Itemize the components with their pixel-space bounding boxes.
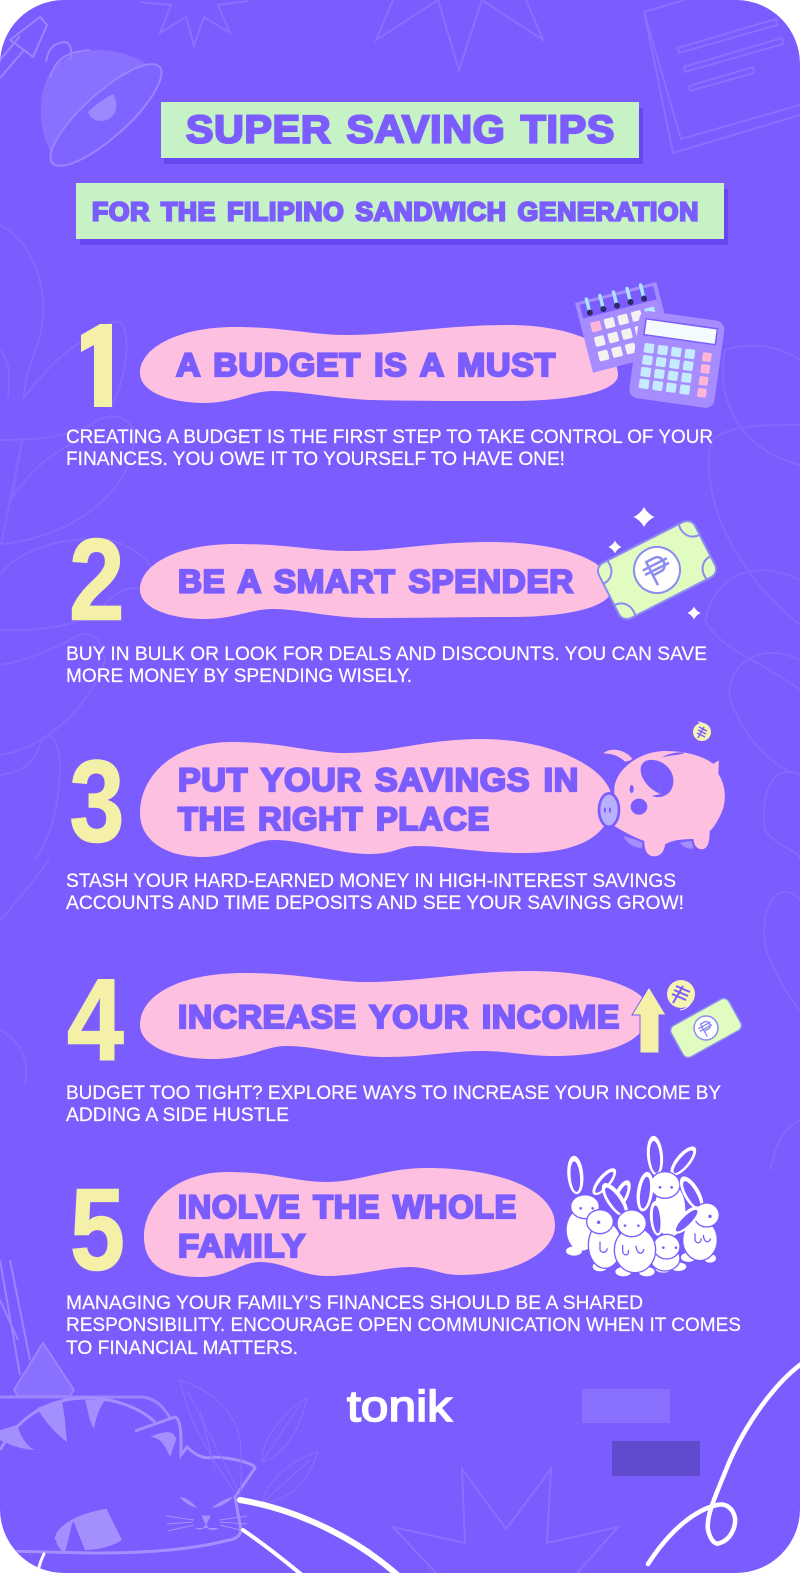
decoration: white swooshes left	[38, 1500, 403, 1573]
tip 4	[66, 956, 744, 1126]
body 4: ADDING A SIDE HUSTLE	[66, 1104, 289, 1126]
heading 5: FAMILY	[178, 1228, 306, 1264]
number 4: 4	[67, 956, 124, 1085]
doodle: lamp	[0, 16, 162, 167]
body 2: MORE MONEY BY SPENDING WISELY.	[66, 665, 412, 687]
decoration: dark rectangle	[612, 1441, 700, 1476]
icon: sparkle large	[634, 507, 654, 527]
icon: small banknote	[668, 996, 744, 1060]
heading 3: THE RIGHT PLACE	[178, 801, 490, 837]
subtitle banner	[76, 183, 728, 245]
body 5: MANAGING YOUR FAMILY’S FINANCES SHOULD BE A SHARED	[66, 1292, 643, 1314]
tip 3	[66, 722, 726, 914]
icon: calculator	[628, 310, 726, 409]
body 4: BUDGET TOO TIGHT? EXPLORE WAYS TO INCREASE YOUR INCOME BY	[66, 1082, 721, 1104]
doodle: sleeping cat	[0, 1260, 255, 1553]
heading 1: A BUDGET IS A MUST	[176, 347, 556, 383]
decoration: light rectangle	[582, 1389, 670, 1423]
rabbit left	[566, 1155, 620, 1256]
tip 1	[66, 281, 726, 470]
heading pill 4	[140, 971, 650, 1059]
icon: sparkle small	[608, 540, 622, 554]
body 1: FINANCES. YOU OWE IT TO YOURSELF TO HAVE ONE!	[66, 448, 565, 470]
rabbit front	[597, 1171, 656, 1276]
rabbit back	[645, 1135, 701, 1237]
decoration: white squiggle right	[648, 1362, 800, 1564]
doodle: leaves near cat	[180, 1380, 318, 1503]
icon: piggy bank	[599, 750, 726, 857]
icon: peso banknote	[595, 518, 719, 622]
body 1: CREATING A BUDGET IS THE FIRST STEP TO TAKE CONTROL OF YOUR	[66, 426, 713, 448]
title banner	[161, 102, 643, 164]
body 3: ACCOUNTS AND TIME DEPOSITS AND SEE YOUR SAVINGS GROW!	[66, 892, 684, 914]
doodle: left leaves	[0, 225, 152, 1085]
heading 2: BE A SMART SPENDER	[178, 564, 574, 600]
doodle: star bottom	[393, 1469, 618, 1573]
rabbit second	[587, 1178, 634, 1271]
icon: calendar	[575, 281, 674, 373]
heading pill 1	[140, 325, 618, 403]
heading 3: PUT YOUR SAVINGS IN	[178, 762, 579, 798]
icon: up arrow	[632, 987, 666, 1053]
body 3: STASH YOUR HARD-EARNED MONEY IN HIGH-INTEREST SAVINGS	[66, 870, 676, 892]
logo: tonik: tonik	[347, 1382, 453, 1431]
body 2: BUY IN BULK OR LOOK FOR DEALS AND DISCOUNTS. YOU CAN SAVE	[66, 643, 707, 665]
icon: coin	[667, 980, 695, 1010]
tip 2	[66, 507, 719, 687]
icon: rabbit family	[566, 1135, 719, 1276]
rabbit front small	[649, 1200, 705, 1273]
doodle: document	[644, 0, 800, 153]
title banner: SUPER SAVING TIPS	[186, 109, 615, 152]
tip 5	[66, 1135, 741, 1359]
doodle: star top left	[140, 1, 248, 46]
body 5: RESPONSIBILITY. ENCOURAGE OPEN COMMUNICATION WHEN IT COMES	[66, 1314, 741, 1336]
icon: coin above piggy	[693, 722, 711, 741]
icon: sparkle bottom	[688, 606, 700, 620]
doodle: right leaves	[705, 346, 800, 1170]
doodle: star top centre	[376, 0, 543, 70]
number 5: 5	[70, 1165, 125, 1294]
rabbit right	[675, 1173, 719, 1263]
heading 4: INCREASE YOUR INCOME	[178, 999, 620, 1035]
heading pill 5	[144, 1168, 555, 1277]
heading 5: INOLVE THE WHOLE	[178, 1189, 517, 1225]
number 3: 3	[70, 736, 124, 866]
number 2: 2	[69, 514, 124, 644]
number 1: 1	[72, 301, 133, 431]
subtitle banner: FOR THE FILIPINO SANDWICH GENERATION	[92, 196, 699, 226]
heading pill 3	[140, 739, 612, 857]
heading pill 2	[140, 542, 612, 619]
body 5: TO FINANCIAL MATTERS.	[66, 1337, 298, 1359]
